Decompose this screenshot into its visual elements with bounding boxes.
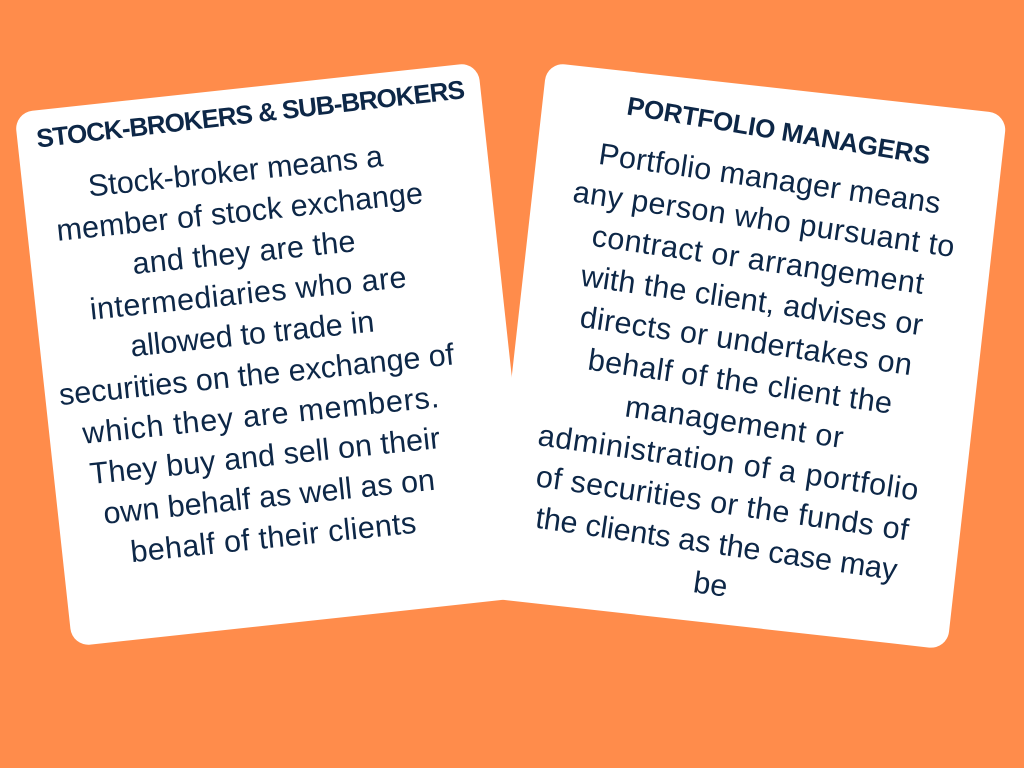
text block: portfolio manager definition: management or [623,390,846,455]
heading: stock-brokers: STOCK-BROKERS & SUB-BROKERS [35,74,466,154]
panel: portfolio managers card [487,62,1007,650]
text block: stock-broker definition: behalf of their clients [129,506,418,569]
text block: stock-broker definition: which they are members. [80,380,440,451]
text block: stock-broker definition: and they are the [131,224,357,281]
text block: portfolio manager definition: administration of a portfolio [536,418,921,507]
text block: portfolio manager definition: be [691,565,730,604]
text block: portfolio manager definition [518,134,963,629]
text block: stock-broker definition: allowed to trade in [129,305,376,364]
text block: stock-broker definition: own behalf as well as on [102,463,436,531]
text block: stock-broker definition: They buy and sell on their [88,421,442,491]
heading: portfolio managers: PORTFOLIO MANAGERS [625,91,933,170]
text block: portfolio manager definition: directs or undertakes on [578,300,914,382]
text block: portfolio manager definition: behalf of the client the [586,343,894,421]
text block: portfolio manager definition: contract or arrangement [590,219,927,301]
text block: stock-broker definition: securities on the exchange of [57,337,456,412]
text block: portfolio manager definition: Portfolio manager means [597,137,943,221]
text block: stock-broker definition: member of stock exchange [55,176,424,248]
text block: stock-broker definition: Stock-broker means a [87,139,384,203]
panel: stock-brokers card [14,62,536,647]
text block: portfolio manager definition: of securities or the funds of [534,459,911,547]
text block: stock-broker definition: intermediaries who are [88,260,408,327]
text block: portfolio manager definition: with the client, advises or [578,259,925,342]
text block: portfolio manager definition: the clients as the case may [533,501,900,587]
text block: portfolio manager definition: any person who pursuant to [571,175,957,264]
text block: stock-broker definition [36,134,473,575]
